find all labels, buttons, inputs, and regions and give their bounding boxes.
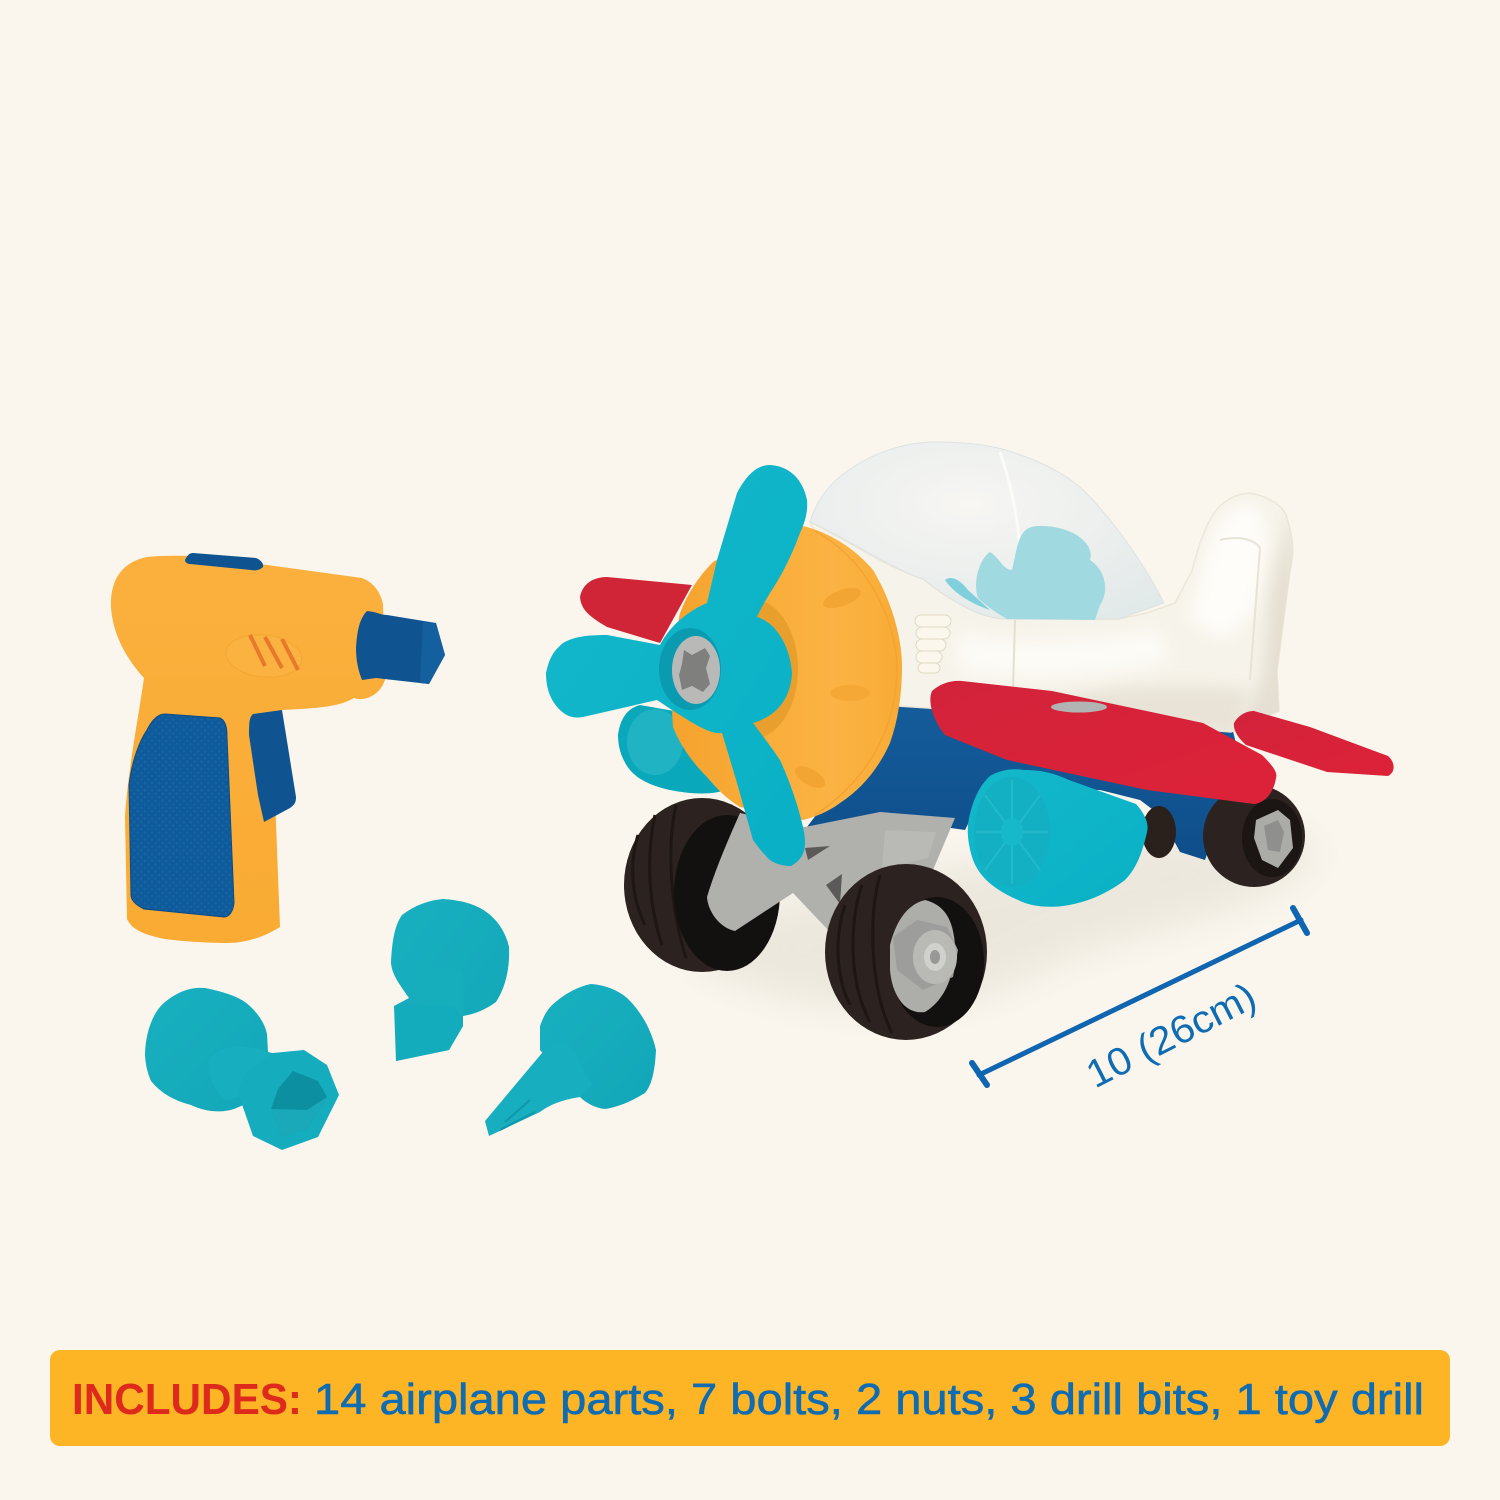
drill: [111, 553, 445, 943]
drill chuck: [356, 611, 445, 684]
drill top button: [185, 553, 263, 570]
left wheel: [624, 798, 780, 972]
rear wheel: [1203, 785, 1305, 887]
drill trigger: [249, 710, 296, 822]
bit hex end: [238, 1050, 339, 1150]
includes bar: [50, 1350, 1450, 1446]
contents list: 14 airplane parts, 7 bolts, 2 nuts, 3 drill bits, 1 toy drill: [314, 1375, 1424, 1424]
far wing: [580, 577, 692, 643]
dimension label: 10 (26cm): [1080, 975, 1263, 1097]
blue belly: [807, 704, 1240, 860]
drill bit: cross head: [485, 984, 656, 1136]
front wheel: [825, 864, 987, 1040]
ground shadow: [690, 829, 1320, 1009]
bit shaft: [208, 1047, 276, 1100]
hub socket: [659, 628, 721, 710]
fuselage: [810, 493, 1300, 735]
drill bit: hex socket: [145, 988, 339, 1150]
pilot figure: [976, 526, 1105, 620]
bit head: [145, 988, 280, 1111]
main wing: [930, 681, 1276, 804]
far engine: [618, 705, 730, 793]
bit shaft and tip: [485, 1045, 592, 1136]
landing gear: [707, 812, 955, 932]
near engine: [968, 769, 1148, 907]
far rear wheel: [1142, 806, 1176, 858]
blades: [546, 465, 807, 866]
drill body: [111, 556, 385, 943]
orange engine cowl: [672, 526, 902, 820]
drill grip: [129, 714, 234, 917]
bit head: [391, 899, 509, 1061]
bit head: [540, 984, 656, 1109]
drill bit: flat head: [391, 899, 509, 1061]
propeller: [546, 465, 807, 866]
airplane: [546, 442, 1394, 1040]
canopy: [810, 442, 1164, 619]
drill side vent: [224, 631, 304, 681]
bit tip: [396, 1006, 463, 1061]
includes label: INCLUDES:: [72, 1375, 302, 1424]
tail wing: [1234, 711, 1394, 776]
product illustration: [50, 442, 1450, 1446]
fuselage vents: [915, 615, 951, 673]
dimension line: [972, 908, 1307, 1097]
bit shaft: [412, 967, 464, 1016]
